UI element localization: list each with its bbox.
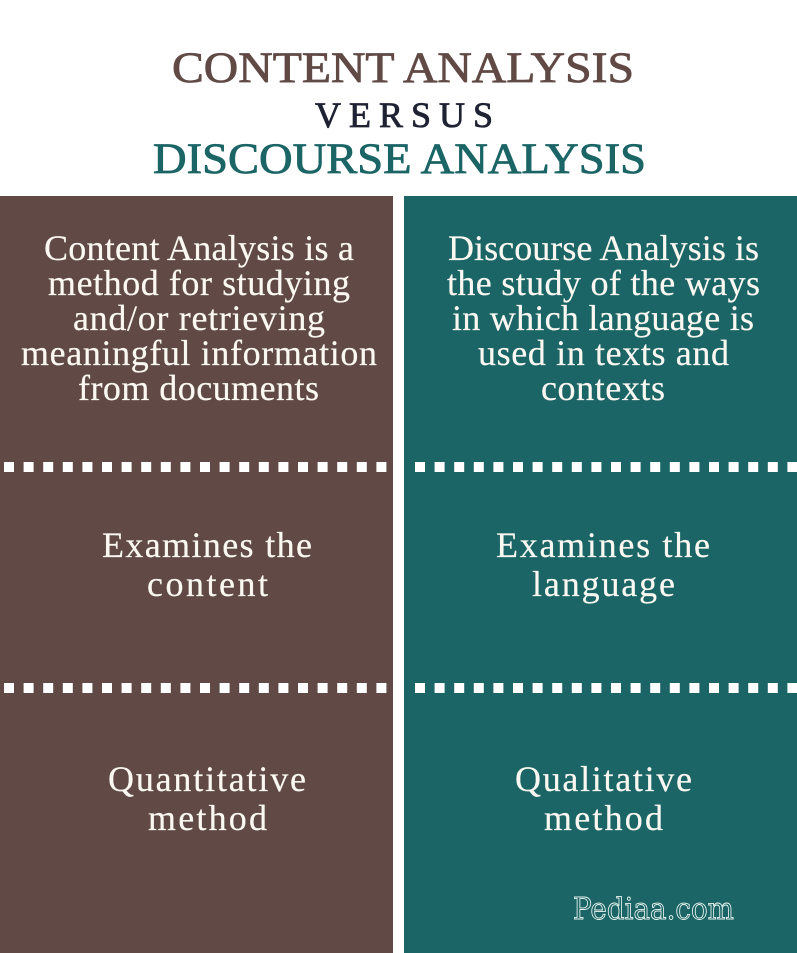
- definition: discourse analysis: [447, 228, 760, 408]
- panel: content analysis: [0, 196, 393, 953]
- focus: content: [102, 525, 312, 604]
- method: quantitative: method: [148, 798, 267, 838]
- definition: content analysis: Content Analysis is a: [44, 228, 354, 268]
- divider: first row: [4, 462, 797, 472]
- focus: language: [496, 525, 710, 604]
- focus: content: Examines the: [102, 525, 312, 565]
- method: qualitative: method: [544, 798, 663, 838]
- definition: discourse analysis: used in texts and: [478, 333, 729, 373]
- definition: discourse analysis: contexts: [541, 368, 665, 408]
- logo: Pediaa.com: Pediaa.com: [573, 892, 734, 927]
- definition: discourse analysis: in which language is: [452, 298, 754, 338]
- focus: language: language: [532, 564, 675, 604]
- method: qualitative: Qualitative: [515, 759, 692, 799]
- definition: discourse analysis: the study of the ways: [447, 263, 760, 303]
- definition: content analysis: from documents: [78, 368, 319, 408]
- definition: content analysis: and/or retrieving: [73, 298, 325, 338]
- definition: content analysis: [21, 228, 377, 408]
- focus: content: content: [147, 564, 268, 604]
- definition: discourse analysis: Discourse Analysis is: [448, 228, 759, 268]
- method: qualitative: [515, 759, 692, 838]
- divider: second row: [4, 683, 797, 693]
- method: quantitative: Quantitative: [108, 759, 306, 799]
- title: [153, 45, 646, 183]
- panel: discourse analysis: [404, 196, 797, 953]
- title: DISCOURSE ANALYSIS: [153, 136, 646, 183]
- definition: content analysis: method for studying: [48, 263, 350, 303]
- method: quantitative: [108, 759, 306, 838]
- title: CONTENT ANALYSIS: [172, 45, 634, 92]
- definition: content analysis: meaningful information: [21, 333, 377, 373]
- title: VERSUS: [315, 95, 493, 135]
- focus: language: Examines the: [496, 525, 710, 565]
